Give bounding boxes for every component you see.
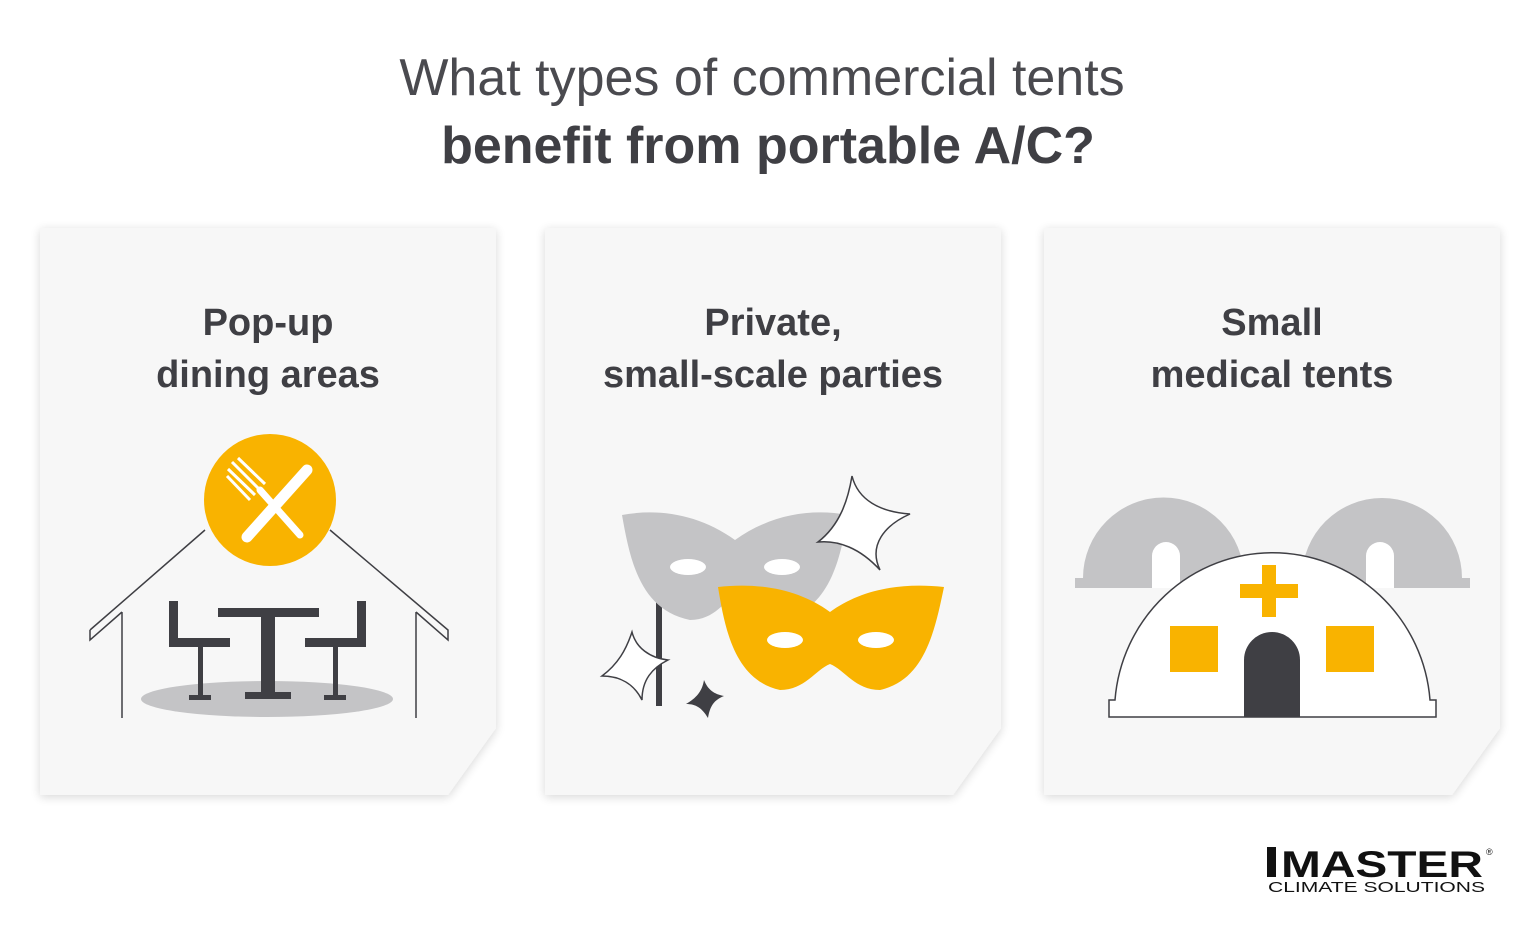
logo: MASTER climate solutions: MASTER bbox=[1281, 844, 1483, 885]
icon: masks bbox=[602, 476, 944, 718]
heading: small medical tents: medical tents bbox=[1151, 354, 1393, 396]
panel: private parties bbox=[545, 228, 1001, 795]
logo: MASTER climate solutions bbox=[1267, 844, 1493, 896]
icon: dining tent bbox=[90, 434, 448, 718]
icon: medical tent bbox=[1075, 498, 1470, 717]
title: What types of commercial tents bbox=[399, 49, 1125, 107]
logo: MASTER climate solutions: ® bbox=[1486, 847, 1493, 857]
panel: pop-up dining bbox=[40, 228, 496, 795]
heading: private parties: Private, bbox=[704, 302, 842, 344]
logo: MASTER climate solutions: CLIMATE SOLUTIONS bbox=[1268, 879, 1485, 896]
panel: medical tents bbox=[1044, 228, 1500, 795]
title bbox=[399, 49, 1125, 175]
heading: private parties: small-scale parties bbox=[603, 354, 943, 396]
heading: pop-up dining areas: dining areas bbox=[156, 354, 380, 396]
heading: pop-up dining areas: Pop-up bbox=[203, 302, 333, 344]
title: benefit from portable A/C? bbox=[441, 117, 1095, 175]
heading: small medical tents: Small bbox=[1221, 302, 1323, 344]
